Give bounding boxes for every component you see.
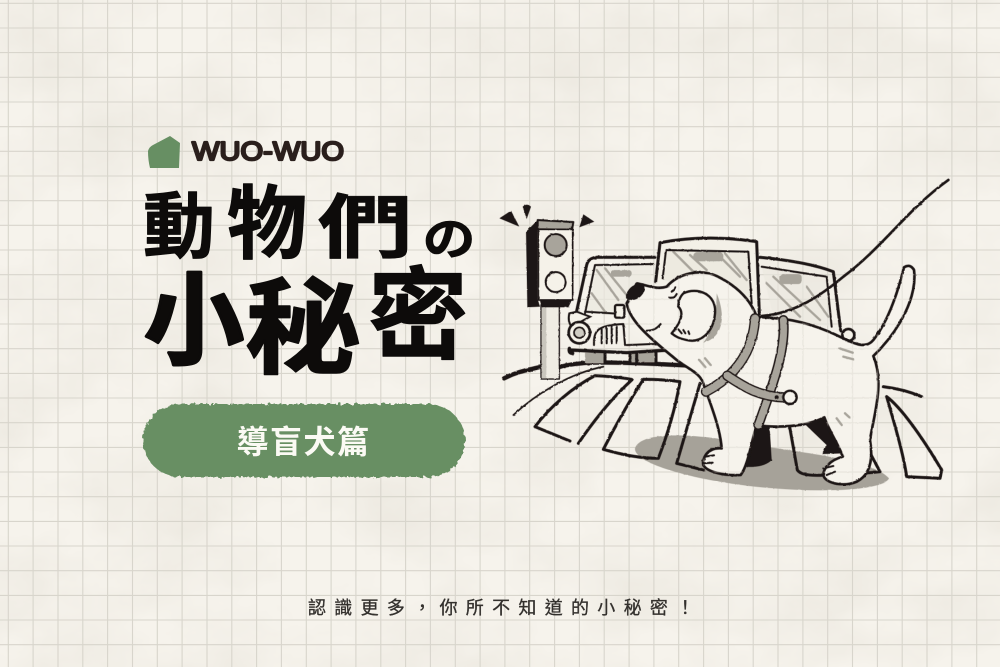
crosswalk stripes bbox=[513, 367, 942, 478]
eye and mouth bbox=[647, 287, 677, 331]
title: 動物們の小秘密: 秘 bbox=[245, 272, 361, 388]
ear bbox=[672, 291, 715, 341]
car: centre bbox=[656, 238, 759, 314]
badge: green pill with subtitle bbox=[143, 404, 465, 477]
road line bbox=[504, 362, 697, 378]
dog body bbox=[627, 266, 914, 484]
far hind leg bbox=[789, 425, 825, 475]
title: 動物們の小秘密: 物 bbox=[227, 180, 307, 269]
logo: house icon and WUO-WUO wordmark bbox=[148, 136, 344, 168]
leash bbox=[762, 180, 948, 316]
title: 動物們の小秘密: の bbox=[423, 214, 475, 265]
alert ticks bbox=[499, 205, 594, 227]
footer text: 認識更多，你所不知道的小秘密！ bbox=[308, 598, 702, 618]
harness ring bbox=[783, 391, 797, 404]
dog bbox=[624, 264, 916, 486]
title: 動物們の小秘密: 動 bbox=[143, 188, 215, 268]
car: left bbox=[569, 257, 670, 364]
car: right bbox=[760, 257, 854, 341]
lamp housing bbox=[538, 220, 573, 230]
harness straps bbox=[706, 318, 784, 425]
title: 動物們の小秘密: 小 bbox=[144, 266, 244, 378]
nose bbox=[626, 283, 645, 300]
title: 動物們の小秘密: 們 bbox=[318, 189, 412, 267]
illustration: guide dog at a crossing bbox=[500, 178, 950, 491]
black far legs bbox=[743, 416, 844, 467]
pill shape bbox=[143, 404, 465, 477]
ear shadow bbox=[703, 293, 722, 343]
ground shadow bbox=[635, 435, 889, 490]
subtitle: 導盲犬篇 bbox=[236, 424, 371, 460]
traffic light bbox=[526, 220, 573, 379]
icon: green house bbox=[148, 136, 180, 168]
pole bbox=[541, 305, 559, 379]
title: 動物們の小秘密: 密 bbox=[368, 261, 468, 373]
logo wordmark: WUO-WUO bbox=[192, 136, 344, 166]
title: 動物們の小秘密 bbox=[143, 180, 475, 388]
paw marks bbox=[703, 455, 835, 475]
fur marks bbox=[699, 348, 853, 425]
